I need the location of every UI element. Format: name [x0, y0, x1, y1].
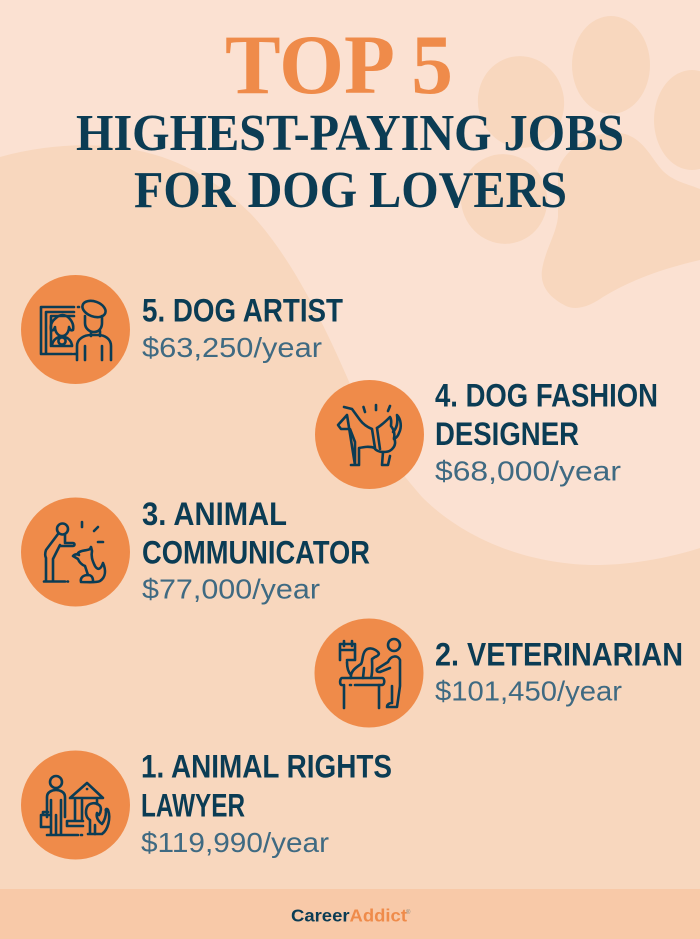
- salary: veterinarian: $101,450/year: [435, 676, 622, 706]
- title: main heading: [76, 105, 624, 219]
- label: animal rights lawyer: 1. ANIMAL RIGHTS: [141, 748, 392, 784]
- job 3: animal communicator: [21, 496, 370, 606]
- label: dog fashion designer: [435, 378, 658, 452]
- title: top 5: TOP 5: [225, 18, 453, 112]
- icon: person training dog: [21, 498, 130, 606]
- job 2: veterinarian: [314, 618, 683, 728]
- label: animal rights lawyer: LAWYER: [141, 788, 245, 824]
- logo: registered mark: ®: [406, 909, 411, 916]
- label: animal rights lawyer: [141, 748, 392, 824]
- footer: [0, 889, 700, 939]
- label: dog artist: 5. DOG ARTIST: [142, 293, 343, 329]
- label: animal communicator: COMMUNICATOR: [142, 534, 370, 570]
- title: main heading: HIGHEST-PAYING JOBS: [76, 105, 624, 162]
- label: dog fashion designer: 4. DOG FASHION: [435, 378, 658, 414]
- job 4: dog fashion designer: [315, 378, 658, 489]
- label: dog fashion designer: DESIGNER: [435, 416, 579, 452]
- salary: animal rights lawyer: $119,990/year: [141, 827, 329, 858]
- icon: artist with dog portrait: [21, 275, 130, 384]
- label: animal communicator: [142, 496, 370, 570]
- salary: dog fashion designer: $68,000/year: [435, 456, 621, 486]
- job 1: animal rights lawyer: [21, 748, 392, 860]
- title: main heading: FOR DOG LOVERS: [134, 162, 567, 219]
- job 5: dog artist: [21, 275, 343, 384]
- label: animal communicator: 3. ANIMAL: [142, 496, 287, 532]
- logo: CareerAddict: CareerAddict: [291, 906, 407, 926]
- icon: lawyer, courthouse and dog: [21, 750, 130, 860]
- salary: dog artist: $63,250/year: [142, 332, 322, 363]
- icon: vet with dog on table: [314, 618, 424, 728]
- background: paw print: [449, 16, 700, 308]
- salary: animal communicator: $77,000/year: [142, 574, 320, 604]
- icon: dog wearing tutu: [315, 380, 424, 489]
